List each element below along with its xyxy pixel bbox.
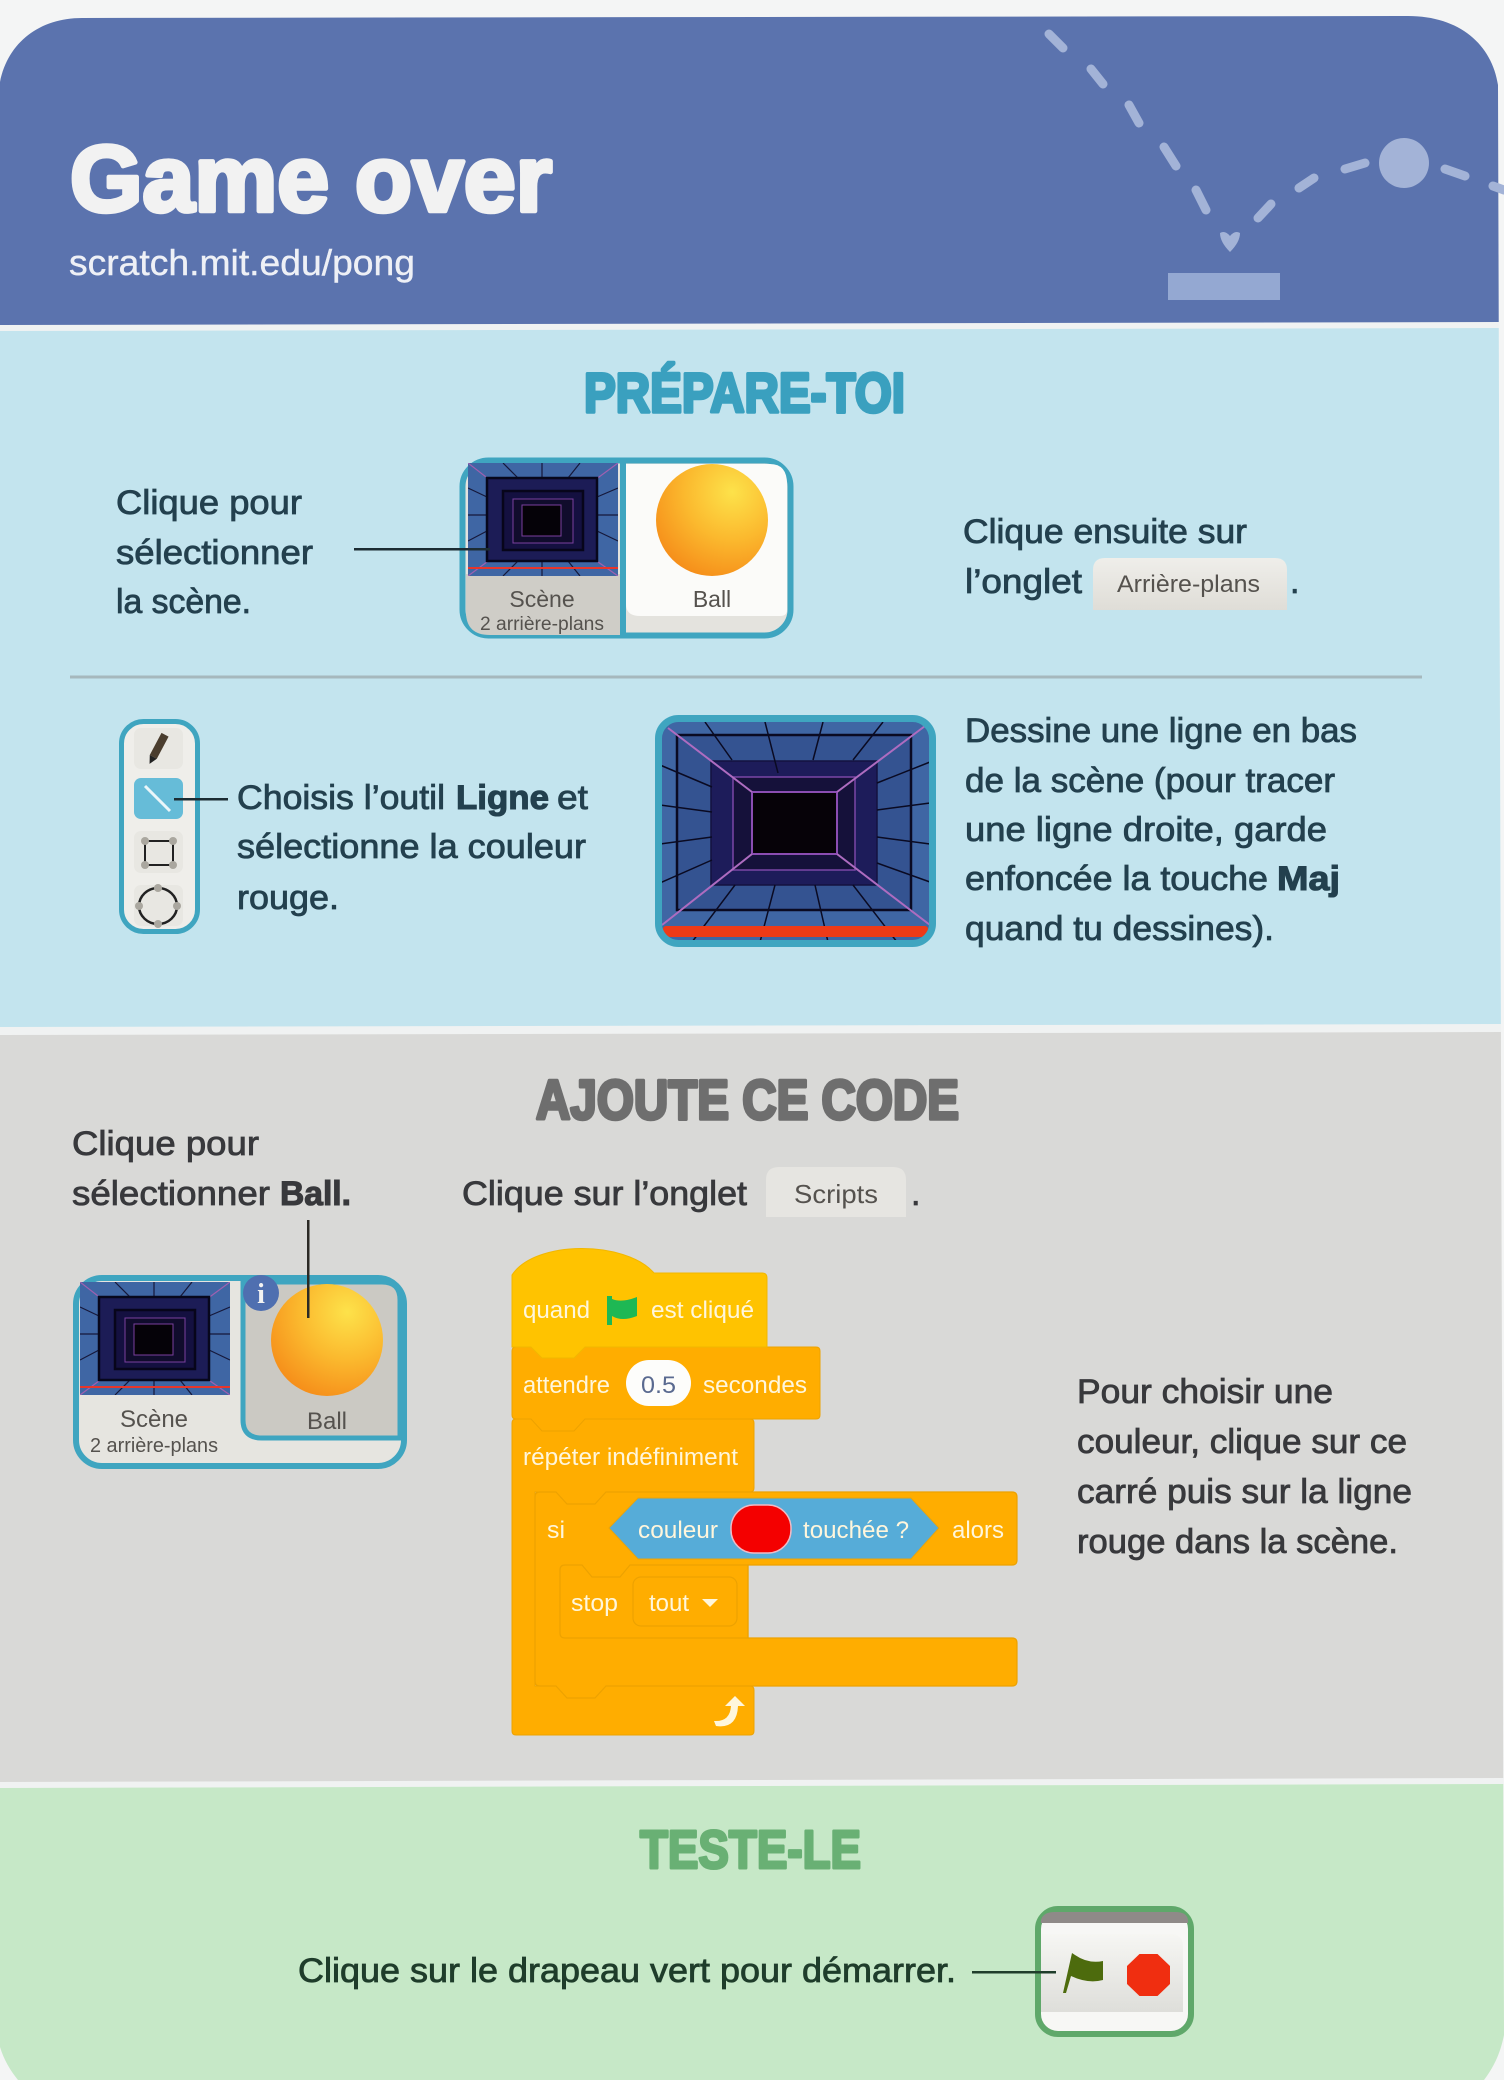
text: choose line tool: sélectionne la couleur — [237, 828, 586, 866]
text: draw a line: quand tu dessines). — [965, 910, 1274, 948]
text: click green flag: Clique sur le drapeau vert pour démarrer. — [298, 1952, 956, 1990]
button: scripts: Scripts — [794, 1179, 878, 1209]
text: select ball: Clique pour — [72, 1125, 259, 1163]
button: arrière-plans: Arrière-plans — [1117, 571, 1260, 598]
icon: line tool selected — [134, 778, 183, 819]
panel: teste-le — [0, 1784, 1504, 2080]
text: choose line tool: rouge. — [237, 879, 339, 917]
text: select ball — [72, 1125, 351, 1213]
block: stop tout — [560, 1565, 748, 1638]
text: draw a line: de la scène (pour tracer — [965, 762, 1335, 800]
text: how to choose a colour: carré puis sur la ligne — [1077, 1473, 1412, 1511]
text: click backdrops tab: l’onglet — [965, 563, 1083, 601]
icon: info: i — [257, 1279, 265, 1310]
title: Game over — [70, 126, 552, 231]
text: choose line tool: Choisis l’outil — [237, 779, 445, 817]
button: scripts — [766, 1167, 906, 1217]
block: quand drapeau est cliqué — [512, 1248, 767, 1358]
icon: rectangle tool — [141, 837, 177, 869]
text: click backdrops tab — [963, 513, 1299, 601]
sprite panel: scene and ball: Ball — [693, 586, 731, 612]
block: attendre: 0.5 — [641, 1372, 676, 1399]
block: quand drapeau est cliqué: est cliqué — [651, 1297, 754, 1324]
text: click scripts tab: Clique sur l’onglet — [462, 1175, 748, 1213]
block: quand drapeau est cliqué: quand — [523, 1297, 590, 1324]
sprite panel: ball selected — [76, 1275, 404, 1466]
text: click backdrops tab: . — [1290, 563, 1299, 601]
block: couleur touchée: touchée ? — [803, 1517, 909, 1544]
stage controls: flag and stop — [1038, 1909, 1191, 2034]
panel: ajoute ce code — [0, 1032, 1504, 1782]
text: draw a line: Maj — [1277, 860, 1340, 898]
text: select the scene: la scène. — [116, 583, 251, 621]
block: répéter indéfiniment — [512, 1419, 754, 1735]
arrow: to line tool — [174, 798, 228, 800]
text: select ball: Ball. — [280, 1175, 351, 1213]
block: si alors: alors — [952, 1517, 1004, 1544]
text: choose line tool: Ligne — [456, 779, 549, 817]
block: couleur touchée: couleur — [638, 1517, 718, 1544]
text: how to choose a colour: couleur, clique sur ce — [1077, 1423, 1407, 1461]
heading: AJOUTE CE CODE — [536, 1068, 959, 1131]
arrow: to scene — [354, 548, 490, 550]
text: draw a line — [965, 712, 1357, 948]
heading: TESTE-LE — [640, 1820, 861, 1880]
text: how to choose a colour: rouge dans la scène. — [1077, 1523, 1398, 1561]
icon: info — [243, 1275, 279, 1311]
code blocks — [512, 1248, 1017, 1735]
text: choose line tool: et — [557, 779, 589, 817]
panel: header — [0, 0, 1504, 325]
sprite panel: ball selected: 2 arrière-plans — [90, 1435, 218, 1457]
text: click scripts tab: . — [911, 1175, 920, 1213]
heading: PRÉPARE-TOI — [584, 361, 905, 424]
text: how to choose a colour — [1077, 1373, 1412, 1561]
arrow: to ball — [307, 1220, 310, 1318]
url: scratch.mit.edu/pong — [69, 242, 415, 283]
block: stop tout: tout — [649, 1590, 689, 1617]
icon: green flag — [607, 1296, 637, 1325]
toolbar: paint tools — [122, 722, 198, 932]
block: stop tout: stop — [571, 1590, 618, 1617]
block: attendre — [512, 1347, 820, 1431]
icon: green flag — [1063, 1953, 1103, 1993]
text: select the scene — [116, 484, 313, 621]
block: couleur touchée — [609, 1498, 939, 1559]
icon: loop arrow — [714, 1696, 745, 1726]
text: draw a line: une ligne droite, garde — [965, 811, 1327, 849]
icon: ellipse tool — [135, 884, 181, 928]
sprite panel: scene and ball: 2 arrière-plans — [480, 614, 604, 635]
text: select ball: sélectionner — [72, 1175, 270, 1213]
block: si alors — [535, 1492, 1017, 1698]
sprite panel: scene and ball — [462, 460, 790, 636]
text: choose line tool — [237, 779, 589, 917]
text: select the scene: sélectionner — [116, 534, 313, 572]
text: select the scene: Clique pour — [116, 484, 302, 522]
icon: stop sign — [1127, 1954, 1170, 1996]
panel: prépare-toi — [0, 328, 1504, 1027]
block: répéter indéfiniment: répéter indéfiniment — [523, 1444, 738, 1471]
button: arrière-plans — [1093, 558, 1287, 610]
icon: bouncing ball path and paddle — [1049, 34, 1504, 300]
text: draw a line: Dessine une ligne en bas — [965, 712, 1357, 750]
sprite panel: ball selected: Ball — [307, 1408, 347, 1435]
text: how to choose a colour: Pour choisir une — [1077, 1373, 1333, 1411]
text: click scripts tab — [462, 1175, 920, 1213]
block: attendre: secondes — [703, 1372, 807, 1399]
arrow: to flag — [972, 1971, 1056, 1974]
sprite panel: ball selected: Scène — [120, 1406, 188, 1433]
backdrop: stage with red line — [658, 718, 934, 944]
divider — [70, 676, 1422, 678]
text: draw a line: enfoncée la touche — [965, 860, 1268, 898]
block: si alors: si — [547, 1517, 565, 1544]
block: attendre: attendre — [523, 1372, 610, 1399]
sprite panel: scene and ball: Scène — [509, 586, 575, 612]
text: click backdrops tab: Clique ensuite sur — [963, 513, 1247, 551]
icon: pencil — [146, 733, 169, 766]
